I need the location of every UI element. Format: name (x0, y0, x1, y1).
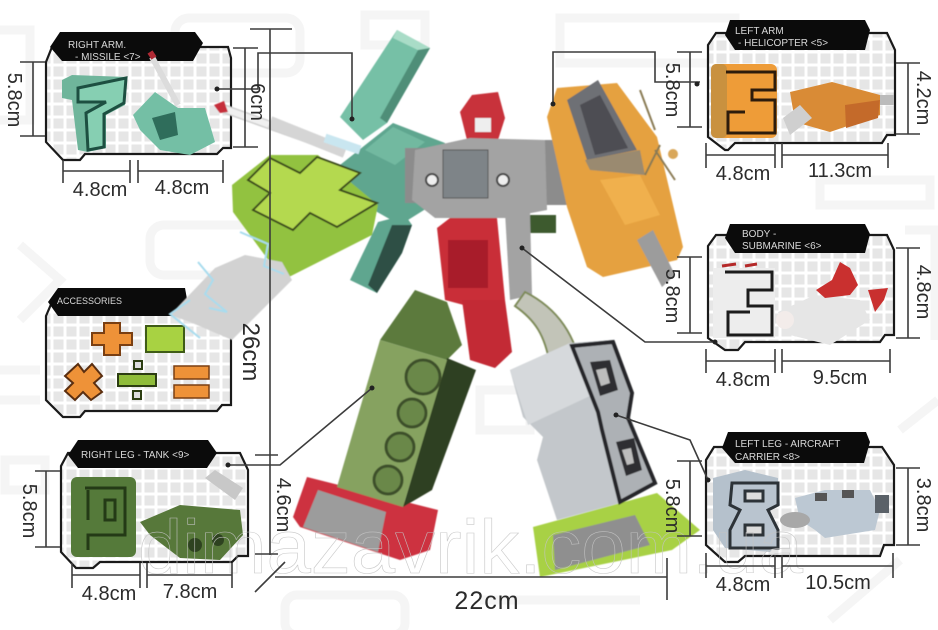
label: right arm: - MISSILE <7> (75, 52, 141, 63)
label: right leg (68, 440, 217, 468)
panel: left leg aircraft carrier (706, 432, 894, 562)
icon: number 8 (713, 470, 780, 552)
icon: missile launcher (133, 52, 215, 155)
dimension labels: 6cm (246, 83, 268, 121)
robot: gray joints (405, 140, 570, 205)
robot: green cross (232, 155, 378, 280)
robot: torso (412, 138, 556, 233)
label: accessories (48, 288, 190, 316)
label: right arm (50, 32, 203, 63)
icon: tank (140, 470, 243, 560)
dimension labels: 22cm (454, 587, 520, 615)
dimension labels: 7.8cm (163, 581, 217, 603)
label: left arm: LEFT ARM (735, 26, 784, 37)
dimension labels: 4.2cm (912, 71, 934, 125)
icon: number 7 (62, 75, 127, 152)
dimension labels: 5.8cm (661, 63, 683, 117)
panel: body submarine (708, 224, 894, 350)
robot: tank leg (337, 340, 476, 507)
icon: aircraft carrier (780, 490, 889, 538)
dimension labels: 5.8cm (661, 269, 683, 323)
dimension labels: 4.8cm (716, 369, 770, 391)
panel: accessories (46, 288, 231, 417)
label: body (725, 224, 870, 253)
icon: number 5 (711, 64, 777, 138)
robot (170, 30, 700, 577)
icon: submarine (776, 262, 888, 345)
dimension labels: 4.8cm (716, 574, 770, 596)
icon: number 6 (713, 264, 775, 338)
dimension labels: 11.3cm (808, 160, 872, 182)
dimension labels: 5.8cm (3, 73, 25, 127)
dimension labels: 5.8cm (18, 484, 40, 538)
robot: missile (214, 101, 360, 152)
label: body: SUBMARINE <6> (742, 241, 822, 252)
robot: teal right arm (340, 30, 445, 293)
robot: orange helicopter arm (547, 80, 683, 287)
icon: green minus (146, 326, 184, 352)
label: left arm (725, 20, 870, 50)
icon: helicopter (783, 82, 894, 135)
dimension labels: 10.5cm (805, 572, 871, 594)
robot: green foot (533, 493, 700, 577)
dimension labels: 4.8cm (716, 163, 770, 185)
watermark: dimazavrik.com.ua (138, 505, 804, 590)
robot: silver leg number 8 (510, 340, 657, 520)
label: right leg: RIGHT LEG - TANK <9> (81, 450, 190, 461)
icon: number 9 (71, 477, 136, 557)
dimension labels: 3.8cm (912, 478, 934, 532)
dimension labels: 9.5cm (813, 367, 867, 389)
label: left leg: CARRIER <8> (735, 452, 800, 463)
leader dots (214, 82, 718, 482)
panel: right arm missile (46, 32, 231, 160)
icon: multiply (65, 364, 102, 400)
robot: leg arc (515, 292, 582, 375)
panel: left arm helicopter (708, 20, 895, 150)
dimension labels: 4.8cm (73, 179, 127, 201)
label: accessories: ACCESSORIES (57, 296, 122, 306)
label: right arm: RIGHT ARM. (68, 40, 126, 51)
icon: plus (92, 323, 132, 355)
label: body: BODY - (742, 229, 776, 240)
robot: red chest (437, 212, 532, 368)
label: left leg (722, 432, 870, 463)
label: left arm: - HELICOPTER <5> (738, 38, 828, 49)
dimension labels: 26cm (237, 323, 264, 381)
dimension labels: 4.8cm (82, 583, 136, 605)
dimension labels: 4.8cm (912, 265, 934, 319)
panel: right leg tank (61, 440, 248, 568)
dimension labels: 4.8cm (155, 177, 209, 199)
robot: tank thigh (380, 290, 462, 360)
robot: silver fist (170, 232, 292, 340)
icon: equals (174, 366, 209, 398)
robot: red foot (293, 477, 438, 560)
label: left leg: LEFT LEG - AIRCRAFT (735, 439, 840, 450)
icon: divide (118, 361, 156, 399)
dimension labels: 5.8cm (661, 479, 683, 533)
dimension labels: 4.6cm (272, 478, 294, 532)
robot: head (460, 92, 505, 140)
